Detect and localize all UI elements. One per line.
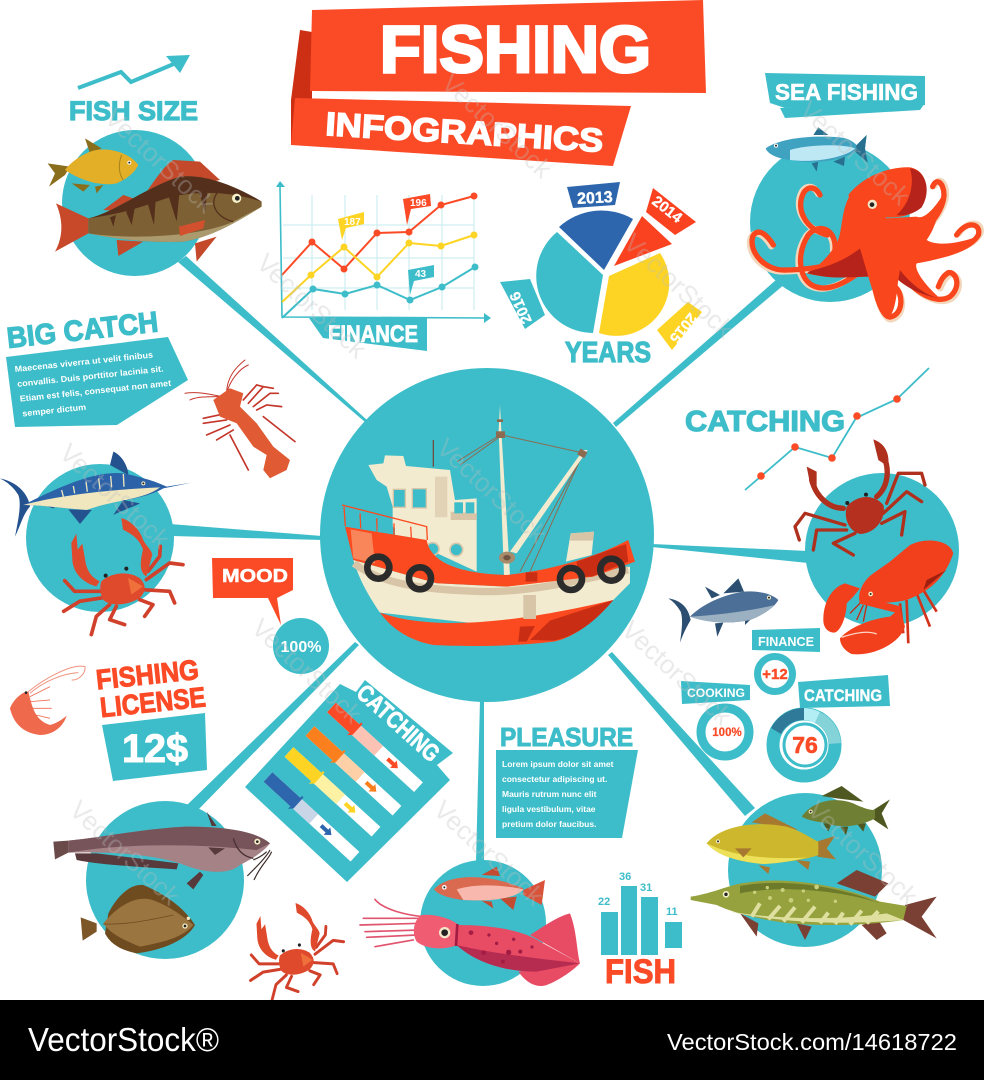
- circle: left marlin and crab: [26, 464, 174, 612]
- banner: infographics: [291, 98, 631, 166]
- bar: yellow: [282, 745, 382, 839]
- circle: central: [320, 368, 654, 702]
- icon: octopus: [750, 167, 981, 319]
- watermark: VectorStock: [616, 614, 739, 732]
- teal series: [282, 264, 478, 318]
- fish bar chart: 36: [619, 871, 631, 883]
- heading: infographics: INFOGRAPHICS: [325, 105, 604, 159]
- connector lines: [170, 256, 808, 862]
- heading: LICENSE: [98, 681, 207, 723]
- fish bar chart: 31: [640, 882, 652, 894]
- label 2013: 2013: [577, 189, 613, 208]
- red series: [282, 192, 478, 275]
- icon: crab bottom: [251, 903, 344, 1000]
- watermark: VectorStock: [428, 794, 551, 912]
- circle: sea fishing: [750, 142, 910, 302]
- flag 187: 187: [344, 217, 361, 228]
- years pie chart: [500, 182, 702, 369]
- circle: catfish and flounder: [86, 801, 244, 959]
- fish bar chart: [598, 871, 682, 991]
- bar: orange: [303, 724, 403, 818]
- fish label: FISH: [605, 953, 676, 991]
- fish bar chart: 22: [598, 896, 610, 908]
- label 2014: [646, 188, 696, 235]
- icon: small lobster: [185, 360, 295, 478]
- slice 2015: [599, 253, 669, 336]
- icon: yellow fish: [48, 138, 138, 193]
- mood 100% badge: 100%: [281, 639, 321, 656]
- cabin: [368, 455, 594, 572]
- catching heading and mini chart: CATCHING: [685, 406, 845, 438]
- pleasure block: [496, 722, 638, 838]
- heading: PLEASURE: [500, 722, 633, 752]
- watermark: [54, 67, 925, 912]
- icon: marlin: [0, 452, 192, 537]
- hull cream: [353, 560, 630, 627]
- big catch block: [5, 306, 188, 427]
- icon: squid: [360, 899, 580, 986]
- mood 100% badge: [273, 618, 329, 674]
- icon: catfish: [53, 812, 272, 889]
- catching gauge: 76: [792, 732, 818, 758]
- tires: [367, 557, 622, 590]
- heading: FISHING: [95, 654, 200, 696]
- panel: [496, 750, 638, 838]
- heading: BIG CATCH: [5, 306, 160, 355]
- finance banner: FINANCE: [328, 321, 418, 348]
- fish bar chart: 11: [666, 906, 678, 918]
- footer url: VectorStock.com/14618722: [667, 1029, 957, 1055]
- slice 2013: [559, 211, 633, 270]
- text: [502, 759, 614, 829]
- axes: [280, 186, 486, 318]
- cooking gauge: 100%: [712, 727, 742, 739]
- hull band: [354, 563, 628, 592]
- catching bars panel: [245, 679, 453, 882]
- footer logo text: VectorStock®: [28, 1021, 219, 1058]
- icon: crab right: [795, 439, 925, 555]
- text: Lorem ipsum dolor sit amet: [502, 759, 614, 769]
- finance gauge: FINANCE: [758, 634, 814, 649]
- watermark: VectorStock: [436, 67, 559, 185]
- text: semper dictum: [22, 402, 87, 418]
- icon: green carp: [802, 786, 890, 835]
- text: Mauris rutrum nunc elit: [502, 789, 597, 799]
- watermark: VectorStock: [802, 794, 925, 912]
- label 2016: [500, 279, 545, 329]
- catching heading and mini chart: [685, 368, 929, 490]
- watermark: VectorStock: [794, 94, 917, 212]
- railing: [342, 505, 427, 540]
- hull red keel: [380, 600, 613, 646]
- text: convallis. Duis porttitor lacinia sit.: [17, 363, 164, 389]
- catching gauge: [771, 675, 890, 776]
- icon: yellow carp: [707, 813, 836, 874]
- label 2013: [567, 182, 620, 208]
- icon: pike: [691, 870, 937, 940]
- fishing boat: [342, 405, 635, 646]
- fishing license block: 12$: [122, 727, 188, 771]
- fish size heading with arrow: [69, 55, 198, 126]
- watermark: VectorStock: [618, 227, 741, 345]
- yellow series: [282, 232, 478, 302]
- heading: fishing: FISHING: [380, 12, 651, 86]
- label 2015: 2015: [666, 309, 700, 346]
- label 2014: 2014: [649, 193, 686, 227]
- flag 196: [403, 194, 431, 225]
- bar: red: [325, 701, 425, 795]
- icon: crab left: [64, 518, 183, 635]
- flag 43: [408, 265, 434, 295]
- text: Etiam est felis, consequat non amet: [19, 378, 172, 404]
- finance gauge: [752, 628, 820, 692]
- cooking gauge: COOKING: [687, 686, 745, 700]
- finance line chart: [276, 181, 491, 351]
- slice 2014: [614, 216, 672, 266]
- watermark: VectorStock: [64, 794, 187, 912]
- hull red upper: [345, 527, 635, 587]
- bar: blue: [261, 770, 361, 864]
- circle: right crab and lobster: [805, 473, 959, 627]
- heading: [95, 653, 207, 723]
- label 2015: [657, 302, 702, 350]
- watermark: VectorStock: [54, 437, 177, 555]
- years label: YEARS: [565, 337, 651, 369]
- icon: big lobster: [823, 540, 953, 654]
- sea fishing banner: SEA FISHING: [775, 79, 918, 105]
- finance gauge: +12: [762, 666, 788, 683]
- title banner: [291, 0, 706, 166]
- sea fishing banner: [765, 73, 925, 118]
- finance banner: [309, 318, 427, 351]
- grid: [283, 195, 474, 310]
- masts and rigging: [433, 405, 588, 575]
- fish size heading with arrow: FISH SIZE: [69, 96, 198, 126]
- panel: [6, 337, 188, 427]
- mood flag: MOOD: [222, 566, 288, 586]
- icon: red fish: [434, 867, 545, 910]
- watermark: VectorStock: [431, 432, 554, 550]
- flag 196: 196: [410, 198, 427, 209]
- text: Maecenas viverra ut velit finibus: [14, 349, 154, 374]
- watermark: VectorStock: [99, 102, 222, 220]
- mood flag: [212, 558, 293, 625]
- banner: fishing: [310, 0, 706, 93]
- funnel: [566, 532, 594, 562]
- flag 43: 43: [415, 269, 427, 280]
- slice 2016: [536, 232, 603, 333]
- circle: squid: [420, 860, 546, 986]
- icon: shrimp: [10, 666, 85, 735]
- text: pretium dolor faucibus.: [502, 819, 596, 829]
- text: [14, 348, 173, 419]
- circle: pike and carp: [728, 793, 882, 947]
- icon: perch: [55, 160, 262, 262]
- heading: CATCHING: [351, 679, 445, 768]
- text: ligula vestibulum, vitae: [502, 804, 596, 814]
- flag 187: [338, 212, 364, 240]
- circle: fish size: [62, 130, 208, 276]
- footer bar: [0, 1000, 984, 1080]
- catching gauge: CATCHING: [804, 686, 882, 705]
- text: consectetur adipiscing ut.: [502, 774, 607, 784]
- watermark: VectorStock: [246, 612, 369, 730]
- fishing license block: [95, 653, 207, 781]
- watermark: VectorStock: [251, 247, 374, 365]
- icon: flounder: [81, 885, 195, 953]
- cooking gauge: [681, 681, 750, 756]
- icon: tuna: [668, 578, 778, 643]
- label 2016: 2016: [507, 289, 536, 326]
- price tag: [102, 713, 207, 781]
- icon: blue fish: [766, 127, 868, 172]
